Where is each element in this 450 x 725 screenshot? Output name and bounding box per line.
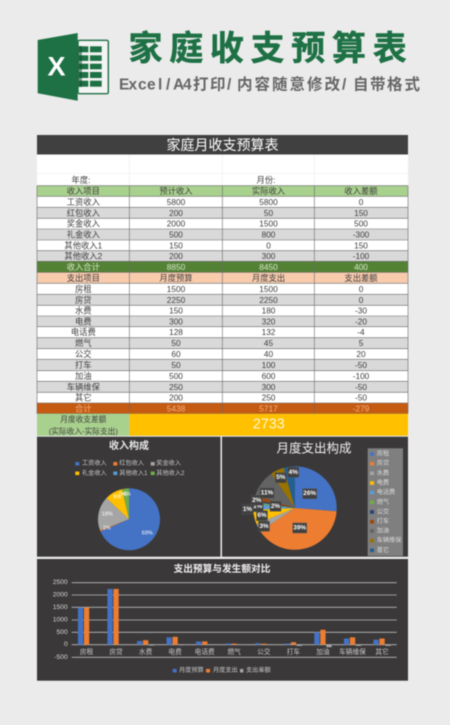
- expense rows: 320: [262, 316, 276, 326]
- y axis labels: 0: [64, 641, 68, 648]
- income rows: 0: [359, 197, 364, 207]
- expense rows: 300: [262, 382, 276, 392]
- icon: excel logo: [38, 33, 108, 101]
- income rows: 150: [169, 240, 183, 250]
- income rows: -100: [353, 251, 370, 261]
- expense rows: 128: [169, 327, 183, 337]
- legend: budget vs actual: [173, 666, 272, 674]
- y axis labels: 1500: [53, 604, 68, 611]
- year and month labels: 月份:: [257, 175, 275, 185]
- income rows: 8450: [259, 262, 278, 272]
- expense rows: 60: [171, 349, 181, 359]
- panel: income composition: [37, 437, 220, 557]
- income rows: 2000: [167, 219, 186, 229]
- y axis labels: 2500: [53, 579, 68, 586]
- expense rows: -4: [357, 327, 365, 337]
- legend: income: 红包收入: [119, 459, 144, 467]
- data labels: 6%: [257, 512, 267, 519]
- pie chart: income: 0%: [119, 492, 127, 498]
- income rows: 收入项目: [67, 186, 100, 196]
- pie chart: income: 69%: [142, 530, 153, 536]
- legend: expense: 电费: [377, 478, 389, 486]
- expense rows: 50: [171, 338, 181, 348]
- y axis labels: 2000: [53, 592, 68, 598]
- income rows: 5800: [259, 197, 278, 207]
- category labels: 车辆维保: [339, 647, 366, 656]
- subtitle: Excel/A4打印/内容随意修改/自带格式: [119, 74, 420, 94]
- legend: budget vs actual: 月度支出: [213, 666, 238, 674]
- main title: 家庭收支预算表: [128, 30, 407, 68]
- legend: expense: 燃气: [377, 498, 389, 506]
- y axis labels: 500: [57, 629, 68, 636]
- income rows: 300: [262, 251, 276, 261]
- expense rows: 月度预算: [159, 273, 193, 283]
- legend: expense: 车辆维保: [377, 536, 402, 544]
- income rows: 0: [266, 240, 271, 250]
- income rows: 200: [169, 208, 183, 218]
- legend: income: 其他收入1: [119, 469, 148, 477]
- legend: expense: 打车: [377, 517, 389, 525]
- table title bar: [37, 135, 408, 154]
- expense rows: 132: [262, 327, 276, 337]
- year and month labels: [72, 175, 275, 185]
- legend: expense: 基它: [377, 546, 389, 554]
- pie chart: expense: [242, 466, 337, 550]
- expense rows: 5717: [259, 403, 278, 413]
- income rows: 红包收入: [67, 208, 100, 218]
- monthly balance label: [37, 414, 129, 436]
- legend: income: 其他收入2: [156, 469, 185, 477]
- category labels: [80, 647, 389, 656]
- expense rows: 1500: [167, 284, 186, 294]
- expense rows: -30: [355, 306, 367, 316]
- legend: income: 工资收入: [82, 459, 107, 467]
- income rows: 其他收入2: [64, 251, 103, 261]
- expense rows: 40: [264, 349, 273, 359]
- income rows: 5800: [167, 197, 186, 207]
- expense rows: 0: [359, 284, 364, 294]
- expense rows: 45: [264, 338, 273, 348]
- bar series: monthly actual: [84, 589, 385, 645]
- expense rows: [67, 273, 378, 413]
- expense rows: 电话费: [71, 327, 96, 337]
- income rows: 工资收入: [67, 197, 100, 207]
- data labels: 2%: [271, 503, 280, 510]
- expense rows: 燃气: [75, 338, 92, 348]
- legend: budget vs actual: 支出差额: [246, 666, 272, 674]
- expense rows: -50: [355, 360, 367, 370]
- pie chart: income: 18%: [102, 512, 113, 518]
- income rows: 1500: [259, 219, 278, 229]
- legend: expense: 加油: [377, 526, 389, 534]
- income rows: 150: [354, 208, 368, 218]
- data labels: [242, 467, 317, 533]
- data labels: 1%: [253, 503, 263, 510]
- table title bar: 家庭月收支预算表: [166, 137, 278, 153]
- expense rows: 2250: [259, 295, 278, 305]
- expense rows: 1500: [259, 284, 278, 294]
- expense rows: -20: [355, 316, 367, 326]
- data labels: 2%: [252, 497, 262, 504]
- income rows: 500: [169, 230, 183, 240]
- income rows: -300: [353, 230, 370, 240]
- legend: expense: 公交: [377, 508, 389, 516]
- data labels: 39%: [293, 524, 306, 532]
- income rows: 50: [264, 208, 273, 218]
- data labels: 1%: [243, 506, 252, 513]
- income rows: 收入合计: [67, 262, 100, 272]
- expense rows: 300: [169, 316, 183, 326]
- pie chart: income: 4%: [123, 492, 131, 498]
- category labels: 电费: [168, 647, 182, 656]
- income rows: 200: [169, 251, 183, 261]
- monthly balance label: 月度收支差额: [60, 414, 107, 424]
- expense rows: -279: [353, 403, 370, 413]
- chart title: expense: 月度支出构成: [276, 440, 352, 455]
- data labels: 26%: [303, 490, 316, 497]
- monthly balance label: (实际收入-实际支出): [49, 426, 118, 436]
- expense rows: 5: [359, 338, 364, 348]
- income rows: 预计收入: [159, 186, 193, 196]
- income rows: 奖金收入: [67, 219, 100, 229]
- expense rows: 房贷: [75, 295, 92, 305]
- income rows: 礼金收入: [67, 230, 100, 240]
- expense rows: 250: [262, 393, 276, 403]
- expense rows: 支出项目: [67, 273, 100, 283]
- category labels: 其它: [375, 647, 389, 656]
- category labels: 房租: [80, 647, 93, 656]
- expense rows: 500: [169, 371, 183, 381]
- legend: expense: 房租: [377, 450, 389, 458]
- income rows: 其他收入1: [64, 240, 103, 250]
- year and month labels: 年度:: [72, 175, 90, 185]
- legend: expense: 房贷: [377, 459, 389, 467]
- row backgrounds: [37, 186, 408, 414]
- expense rows: 200: [169, 393, 183, 403]
- monthly balance value: 2733: [253, 417, 285, 433]
- expense rows: 250: [169, 382, 183, 392]
- legend: income: 礼金收入: [82, 469, 107, 477]
- expense rows: 合计: [75, 403, 92, 413]
- income rows: 收入差额: [344, 186, 378, 196]
- expense rows: 车辆维保: [67, 382, 101, 392]
- monthly balance value: [129, 414, 408, 436]
- chart title: income: 收入构成: [109, 439, 149, 452]
- legend: income: [75, 459, 185, 477]
- pie chart: income: [98, 488, 160, 550]
- category labels: 加油: [316, 647, 330, 656]
- expense rows: 180: [262, 306, 276, 316]
- data labels: 4%: [289, 469, 298, 476]
- panel: monthly expense composition: [222, 437, 408, 557]
- data labels: 11%: [261, 490, 274, 496]
- expense rows: 50: [171, 360, 181, 370]
- expense rows: 打车: [75, 360, 92, 370]
- expense rows: -100: [353, 371, 370, 381]
- category labels: 水费: [139, 647, 153, 656]
- expense rows: 100: [262, 360, 276, 370]
- expense rows: 支出差额: [344, 273, 378, 283]
- income rows: 400: [354, 262, 368, 272]
- expense rows: 150: [169, 306, 183, 316]
- icon: excel logo: X: [47, 52, 66, 82]
- expense rows: 600: [262, 371, 276, 381]
- budget table: [37, 154, 408, 414]
- income rows: 800: [262, 230, 276, 240]
- pie chart: income: 9%: [113, 495, 121, 501]
- legend: expense: 水费: [377, 469, 389, 477]
- legend: expense: 电话费: [377, 488, 395, 496]
- expense rows: 其它: [75, 393, 92, 403]
- expense rows: -50: [355, 393, 367, 403]
- category labels: 燃气: [228, 647, 241, 656]
- expense rows: 加油: [75, 371, 92, 381]
- bar series: monthly budget: [78, 589, 379, 645]
- pie chart: income: 1%: [103, 526, 111, 532]
- chart title: budget vs actual: 支出预算与发生额对比: [174, 562, 271, 575]
- y axis labels: -500: [54, 654, 68, 661]
- y axis labels: [53, 579, 68, 661]
- data labels: 3%: [259, 523, 269, 530]
- expense rows: 公交: [75, 349, 92, 359]
- legend: budget vs actual: 月度预算: [179, 666, 204, 674]
- income rows: 8850: [167, 262, 186, 272]
- category labels: 公交: [257, 647, 271, 656]
- expense rows: 20: [356, 349, 366, 359]
- expense rows: 水费: [75, 306, 92, 316]
- category labels: 房贷: [109, 647, 123, 656]
- legend: expense: [368, 448, 403, 556]
- expense rows: 电费: [75, 316, 92, 326]
- expense rows: 房租: [75, 284, 92, 294]
- income rows: [64, 186, 378, 272]
- category labels: 电话费: [195, 647, 215, 656]
- income rows: 实际收入: [252, 186, 285, 196]
- legend: income: 奖金收入: [156, 459, 181, 467]
- y axis labels: 1000: [53, 616, 68, 624]
- expense rows: 0: [359, 295, 364, 305]
- bar series: variance: [149, 645, 391, 647]
- expense rows: -50: [355, 382, 367, 392]
- category labels: 打车: [287, 647, 300, 656]
- income rows: 500: [354, 219, 368, 229]
- expense rows: 5438: [167, 403, 186, 413]
- income rows: 150: [354, 240, 368, 250]
- data labels: 5%: [276, 474, 286, 481]
- expense rows: 2250: [167, 295, 186, 305]
- panel: budget vs actual: [37, 559, 408, 681]
- expense rows: 月度支出: [252, 273, 285, 283]
